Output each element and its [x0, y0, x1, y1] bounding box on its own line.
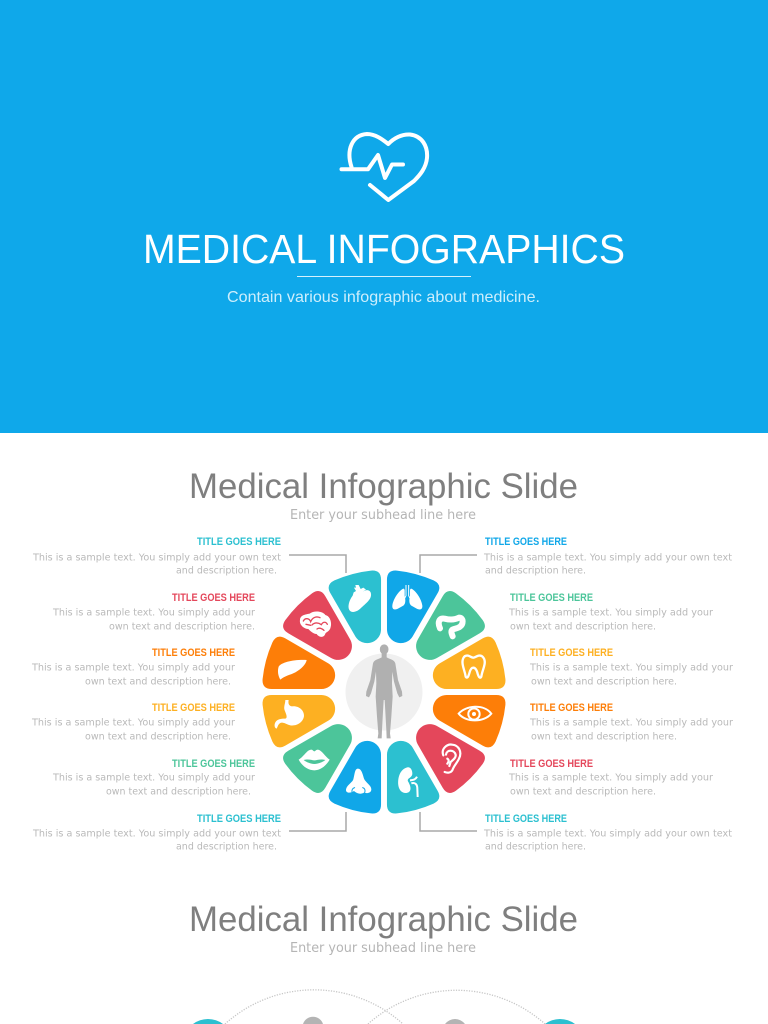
subhead: first slide: Enter your subhead line here [290, 508, 476, 523]
icon: nose [346, 769, 371, 794]
text block: left 2: TITLE GOES HERE [172, 592, 255, 604]
text block: right 4: own text and description here. [531, 732, 677, 742]
text block: right 2: TITLE GOES HERE [510, 592, 593, 604]
text block: left 5: This is a sample text. You simply add your [52, 772, 256, 784]
text block: left 6 [32, 813, 281, 852]
text block: left 3 [31, 647, 236, 688]
text block: left 6: This is a sample text. You simply add your own text [32, 828, 281, 840]
icon: lips [299, 750, 330, 770]
text block: right 5: own text and description here. [510, 786, 656, 798]
text block: right 1: This is a sample text. You simply add your own text [483, 552, 732, 564]
text block: right 1: TITLE GOES HERE [485, 536, 567, 548]
icon: lungs [392, 585, 422, 610]
icon: intestine [439, 618, 463, 636]
text block: left 2: This is a sample text. You simply add your [52, 608, 256, 618]
text block: left 2 [52, 592, 256, 632]
connector lines [289, 555, 477, 831]
text block: left 6: and description here. [176, 842, 277, 852]
icon: brain [300, 612, 331, 637]
panel: blue cover header [0, 0, 768, 433]
text block: right 2: This is a sample text. You simply add your [508, 608, 714, 618]
icon: stomach [275, 700, 304, 729]
dotted arcs diagram, cropped [193, 990, 575, 1024]
icon: heart organ [349, 585, 371, 612]
icon: eye [459, 707, 491, 720]
text block: left 5: TITLE GOES HERE [172, 758, 255, 770]
text block: right 6: TITLE GOES HERE [485, 813, 567, 825]
heading: second slide: Medical Infographic Slide [189, 900, 578, 939]
text block: right 5: This is a sample text. You simply add your [508, 772, 714, 784]
text block: left 4: This is a sample text. You simply add your [31, 718, 236, 728]
text block: right 3 [529, 647, 734, 688]
text block: right 4: TITLE GOES HERE [530, 702, 613, 714]
text block: left 1 [32, 536, 281, 576]
text block: left 1: TITLE GOES HERE [197, 536, 281, 548]
text block: left 3: own text and description here. [85, 676, 231, 688]
text block: left 5 [52, 758, 256, 798]
icon: liver [278, 660, 307, 680]
icon: kidney [398, 767, 418, 797]
subtitle: Contain various infographic about medicine. [227, 289, 540, 306]
title: MEDICAL INFOGRAPHICS [143, 226, 625, 272]
heading: first slide: Medical Infographic Slide [189, 467, 578, 506]
text block: right 4: This is a sample text. You simply add your [529, 718, 734, 728]
icon: human body silhouette [366, 644, 402, 738]
text block: left 2: own text and description here. [109, 622, 255, 632]
text block: right 2 [508, 592, 714, 632]
wheel diagram of organs [259, 567, 509, 817]
right text blocks [483, 536, 734, 852]
text block: left 5: own text and description here. [106, 786, 251, 798]
text block: right 6: and description here. [485, 842, 586, 852]
node: left teal circle [193, 1019, 223, 1024]
text block: left 4: own text and description here. [85, 732, 231, 742]
icon: heart with pulse line [342, 134, 427, 200]
node: right gray circle [445, 1019, 465, 1024]
text block: left 1: This is a sample text. You simply add your own text [32, 552, 281, 564]
text block: left 3: This is a sample text. You simply add your [31, 662, 236, 674]
text block: right 5: TITLE GOES HERE [510, 758, 593, 770]
text block: left 6: TITLE GOES HERE [197, 813, 281, 825]
node: left gray circle [303, 1017, 323, 1024]
text block: right 5 [508, 758, 714, 798]
icon: tooth [462, 656, 485, 678]
title underline [297, 276, 471, 277]
text block: left 4 [31, 702, 236, 742]
text block: left 3: TITLE GOES HERE [152, 647, 235, 659]
node: right teal circle [545, 1019, 575, 1024]
text block: right 6: This is a sample text. You simply add your own text [483, 828, 732, 840]
text block: right 2: own text and description here. [510, 622, 656, 632]
text block: right 6 [483, 813, 732, 852]
text block: right 3: This is a sample text. You simply add your [529, 662, 734, 674]
text block: left 4: TITLE GOES HERE [152, 702, 235, 714]
icon: ear [443, 745, 460, 773]
text block: right 1: and description here. [485, 566, 586, 576]
wheel segments [259, 567, 509, 817]
text block: right 1 [483, 536, 732, 576]
text block: right 3: own text and description here. [531, 676, 677, 688]
left text blocks [31, 536, 281, 852]
center circle [346, 654, 422, 730]
text block: right 3: TITLE GOES HERE [530, 647, 613, 659]
text block: left 1: and description here. [176, 566, 277, 576]
text block: right 4 [529, 702, 734, 742]
subhead: second slide: Enter your subhead line here [290, 941, 476, 956]
